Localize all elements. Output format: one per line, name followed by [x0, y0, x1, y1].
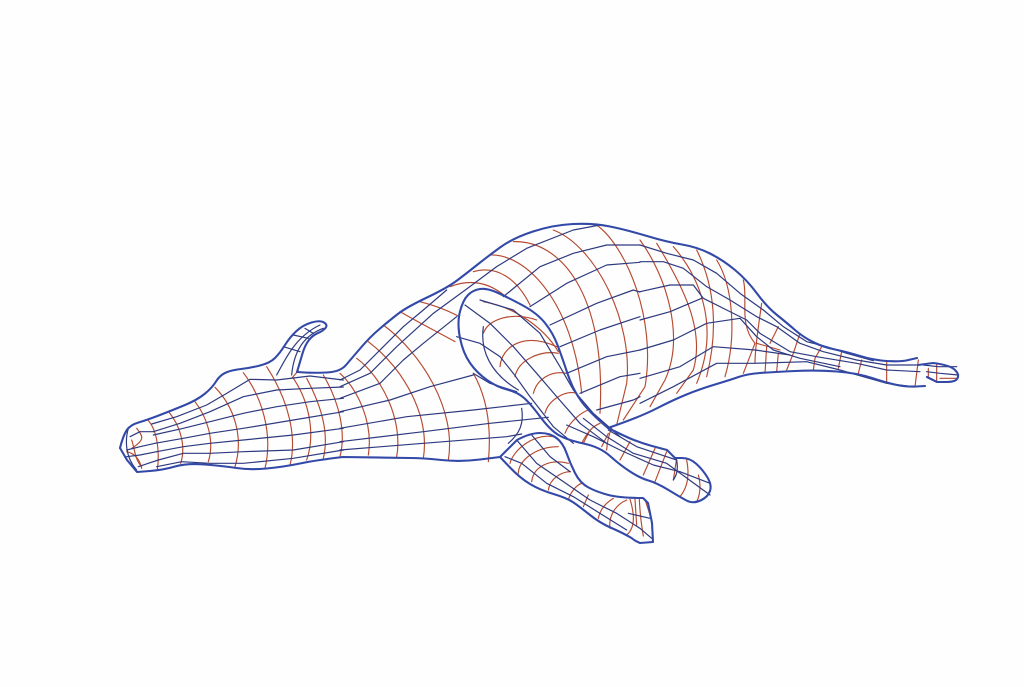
head and neck mesh: [126, 325, 343, 470]
front legs mesh: [505, 418, 710, 538]
shoulder and torso mesh: [340, 225, 648, 462]
outer contour: [120, 224, 958, 543]
hindquarter and rear leg mesh: [640, 240, 958, 407]
horn mesh: [277, 325, 323, 375]
